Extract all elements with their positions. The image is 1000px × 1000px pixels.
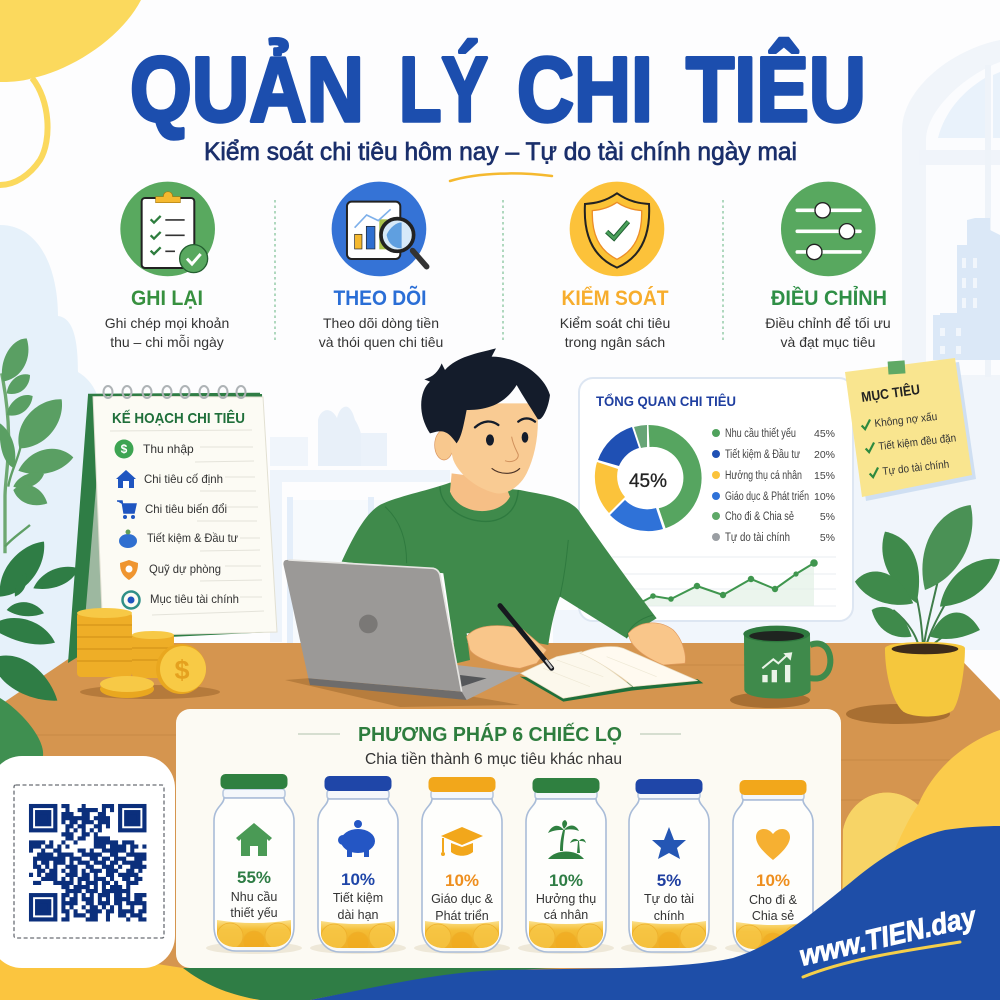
text: Theo dõi dòng tiền bbox=[323, 315, 439, 331]
notebook: kế hoạch chi tiêu bbox=[68, 386, 277, 663]
legend: 20% bbox=[814, 449, 835, 461]
legend: 15% bbox=[814, 470, 835, 482]
jar: tiết kiệm dài hạn: dài hạn bbox=[337, 908, 379, 922]
facial features bbox=[475, 418, 535, 473]
decoration: yellow blob top-left bbox=[0, 0, 141, 82]
jar: nhu cầu thiết yếu: thiết yếu bbox=[230, 906, 278, 920]
icon: piggy bank bbox=[338, 820, 375, 857]
plant: left bbox=[0, 338, 78, 701]
legend: Tự do tài chính bbox=[725, 532, 790, 544]
wave: blue bbox=[310, 826, 1000, 1000]
mug bbox=[743, 626, 830, 698]
jar: tự do tài chính: chính bbox=[654, 909, 684, 923]
legend: Tiết kiệm & Đầu tư bbox=[725, 449, 800, 461]
title: QUẢN bbox=[130, 38, 364, 141]
dashboard heading: TỔNG QUAN CHI TIÊU bbox=[596, 392, 736, 409]
title: LÝ bbox=[399, 38, 488, 141]
jar: hưởng thụ cá nhân: cá nhân bbox=[544, 908, 588, 922]
pen bbox=[500, 606, 552, 668]
legend: Hưởng thụ cá nhân bbox=[725, 470, 802, 482]
heading: ĐIỀU CHỈNH bbox=[771, 287, 887, 310]
wave: yellow left bbox=[0, 940, 260, 1000]
jar: giáo dục & phát triển: 10% bbox=[445, 871, 479, 890]
title: TIÊU bbox=[686, 37, 866, 141]
jar: cho đi & chia sẻ: Chia sẻ bbox=[752, 909, 794, 923]
man bbox=[342, 348, 657, 663]
book cover bbox=[520, 677, 703, 702]
text: trong ngân sách bbox=[565, 334, 665, 350]
jar: cho đi & chia sẻ: 10% bbox=[756, 871, 790, 890]
notebook stand bbox=[68, 394, 274, 663]
item: tiết kiệm & đầu tư: Tiết kiệm & Đầu tư bbox=[147, 531, 238, 545]
panel: kiểm soát bbox=[560, 182, 670, 350]
heading: KIỂM SOÁT bbox=[562, 287, 669, 310]
icon: clipboard bbox=[120, 182, 215, 276]
pot bbox=[885, 642, 965, 716]
coin stack: tall bbox=[77, 608, 132, 677]
wave: yellow right bbox=[842, 730, 1000, 930]
jar: hưởng thụ cá nhân: 10% bbox=[549, 871, 583, 890]
notebook heading: KẾ HOẠCH CHI TIÊU bbox=[112, 409, 245, 427]
qr card bbox=[0, 756, 175, 968]
item: chi tiêu cố định bbox=[116, 470, 223, 488]
item: thu nhập: Thu nhập bbox=[143, 442, 194, 456]
sticky items: Tiết kiệm đều đặn bbox=[878, 432, 957, 453]
shirt bbox=[342, 483, 657, 663]
coins bbox=[77, 608, 206, 698]
face bbox=[450, 403, 538, 494]
text: và thói quen chi tiêu bbox=[319, 334, 443, 350]
panel: điều chỉnh bbox=[765, 182, 891, 350]
sticky items: Tự do tài chính bbox=[882, 459, 950, 478]
plant: potted bbox=[855, 505, 1000, 716]
decoration: yellow ring bbox=[0, 78, 48, 185]
donut chart bbox=[595, 425, 702, 531]
icon: star bbox=[652, 827, 686, 859]
icon: heart bbox=[756, 829, 790, 860]
title: CHI bbox=[517, 39, 653, 141]
jar: giáo dục & phát triển: Phát triển bbox=[435, 909, 489, 923]
wave: green bbox=[183, 968, 560, 1000]
icon: graduation cap bbox=[441, 827, 483, 856]
line chart bbox=[612, 557, 836, 606]
item: chi tiêu cố định: Chi tiêu cố định bbox=[144, 472, 223, 486]
tape bbox=[888, 360, 905, 375]
item: mục tiêu tài chính bbox=[122, 592, 239, 608]
subtitle underline bbox=[450, 173, 552, 181]
legend bbox=[712, 428, 835, 544]
qr code bbox=[29, 806, 146, 919]
legend: 10% bbox=[814, 491, 835, 503]
notebook page bbox=[93, 396, 277, 636]
legend: 5% bbox=[820, 532, 835, 544]
icon: house bbox=[236, 823, 272, 856]
text: Ghi chép mọi khoản bbox=[105, 315, 229, 331]
legend: 5% bbox=[820, 511, 835, 523]
sticky items: Không nợ xấu bbox=[874, 411, 938, 430]
panel: theo dõi bbox=[319, 182, 443, 350]
panel: phương pháp 6 chiếc lọ bbox=[176, 709, 841, 968]
item: quỹ dự phòng: Quỹ dự phòng bbox=[149, 562, 221, 576]
sticky note: mục tiêu bbox=[845, 358, 976, 501]
jar: hưởng thụ cá nhân: Hưởng thụ bbox=[536, 892, 596, 906]
jar: giáo dục & phát triển: Giáo dục & bbox=[431, 892, 494, 906]
panel: ghi lại bbox=[105, 182, 229, 350]
legend: Giáo dục & Phát triển bbox=[725, 491, 809, 503]
hair bbox=[421, 348, 550, 443]
qr frame bbox=[14, 785, 164, 938]
jar: tự do tài chính bbox=[621, 779, 717, 954]
jar: tiết kiệm dài hạn: 10% bbox=[341, 870, 375, 889]
jar: nhu cầu thiết yếu: Nhu cầu bbox=[231, 890, 277, 904]
sticky items bbox=[861, 411, 957, 479]
website url: www.TIEN.day bbox=[796, 901, 981, 973]
subtitle: Kiểm soát chi tiêu hôm nay – Tự do tài chính ngày mai bbox=[204, 138, 797, 166]
url underline bbox=[803, 942, 960, 977]
jar: tiết kiệm dài hạn bbox=[310, 776, 406, 954]
icon: palm island bbox=[548, 820, 586, 859]
coin: flat bbox=[100, 676, 154, 698]
text: thu – chi mỗi ngày bbox=[110, 334, 224, 350]
laptop bbox=[283, 560, 522, 700]
icon: chart with magnifier bbox=[332, 182, 427, 276]
ear bbox=[435, 430, 453, 460]
item: chi tiêu biến đổi: Chi tiêu biến đổi bbox=[145, 502, 227, 516]
jar: giáo dục & phát triển bbox=[414, 777, 510, 954]
item: thu nhập bbox=[114, 440, 194, 458]
jar: tiết kiệm dài hạn: Tiết kiệm bbox=[333, 891, 383, 905]
item: mục tiêu tài chính: Mục tiêu tài chính bbox=[150, 592, 239, 606]
jar: cho đi & chia sẻ bbox=[725, 780, 821, 955]
background: window and city bbox=[902, 40, 1000, 380]
jar: nhu cầu thiết yếu bbox=[206, 774, 302, 954]
legend: Cho đi & Chia sẻ bbox=[725, 511, 794, 523]
title bbox=[130, 37, 866, 141]
panel heading: PHƯƠNG PHÁP 6 CHIẾC LỌ bbox=[358, 723, 622, 746]
jar: tự do tài chính: Tự do tài bbox=[644, 892, 694, 906]
text: Điều chỉnh để tối ưu bbox=[765, 315, 891, 331]
hand: writing bbox=[467, 626, 547, 668]
background: pale blue room shapes bbox=[0, 225, 1000, 720]
item: chi tiêu biến đổi bbox=[117, 501, 227, 519]
desk bbox=[0, 643, 1000, 1000]
heading: GHI LẠI bbox=[131, 287, 203, 310]
text: Kiểm soát chi tiêu bbox=[560, 315, 670, 331]
neck bbox=[450, 473, 510, 511]
icon: sliders bbox=[781, 182, 876, 276]
item: tiết kiệm & đầu tư bbox=[119, 530, 238, 548]
jar: nhu cầu thiết yếu: 55% bbox=[237, 868, 271, 887]
jar: tự do tài chính: 5% bbox=[657, 871, 681, 890]
jar: cho đi & chia sẻ: Cho đi & bbox=[749, 893, 798, 907]
book pages bbox=[521, 652, 632, 698]
leaf: bottom-left bbox=[0, 698, 43, 775]
dashboard: tổng quan chi tiêu bbox=[579, 378, 853, 621]
hand: right bbox=[628, 623, 685, 665]
bottom waves bbox=[0, 730, 1000, 1000]
icon: growth chart bbox=[762, 652, 792, 682]
laptop logo bbox=[359, 615, 378, 633]
text: và đạt mục tiêu bbox=[781, 334, 875, 350]
item: quỹ dự phòng bbox=[120, 560, 221, 580]
heading: THEO DÕI bbox=[334, 286, 426, 310]
dashboard panel bbox=[579, 378, 853, 621]
book bbox=[467, 606, 703, 702]
panel subheading: Chia tiền thành 6 mục tiêu khác nhau bbox=[365, 751, 622, 768]
sticky heading: MỤC TIÊU bbox=[860, 380, 921, 405]
icon: shield bbox=[570, 182, 664, 276]
jar: hưởng thụ cá nhân bbox=[518, 778, 614, 954]
coin stack: short bbox=[132, 631, 174, 678]
donut value: 45% bbox=[629, 471, 667, 492]
legend: 45% bbox=[814, 428, 835, 440]
coin: upright: $ bbox=[174, 655, 190, 685]
legend: Nhu cầu thiết yếu bbox=[725, 428, 796, 440]
item: thu nhập: $ bbox=[121, 442, 128, 456]
